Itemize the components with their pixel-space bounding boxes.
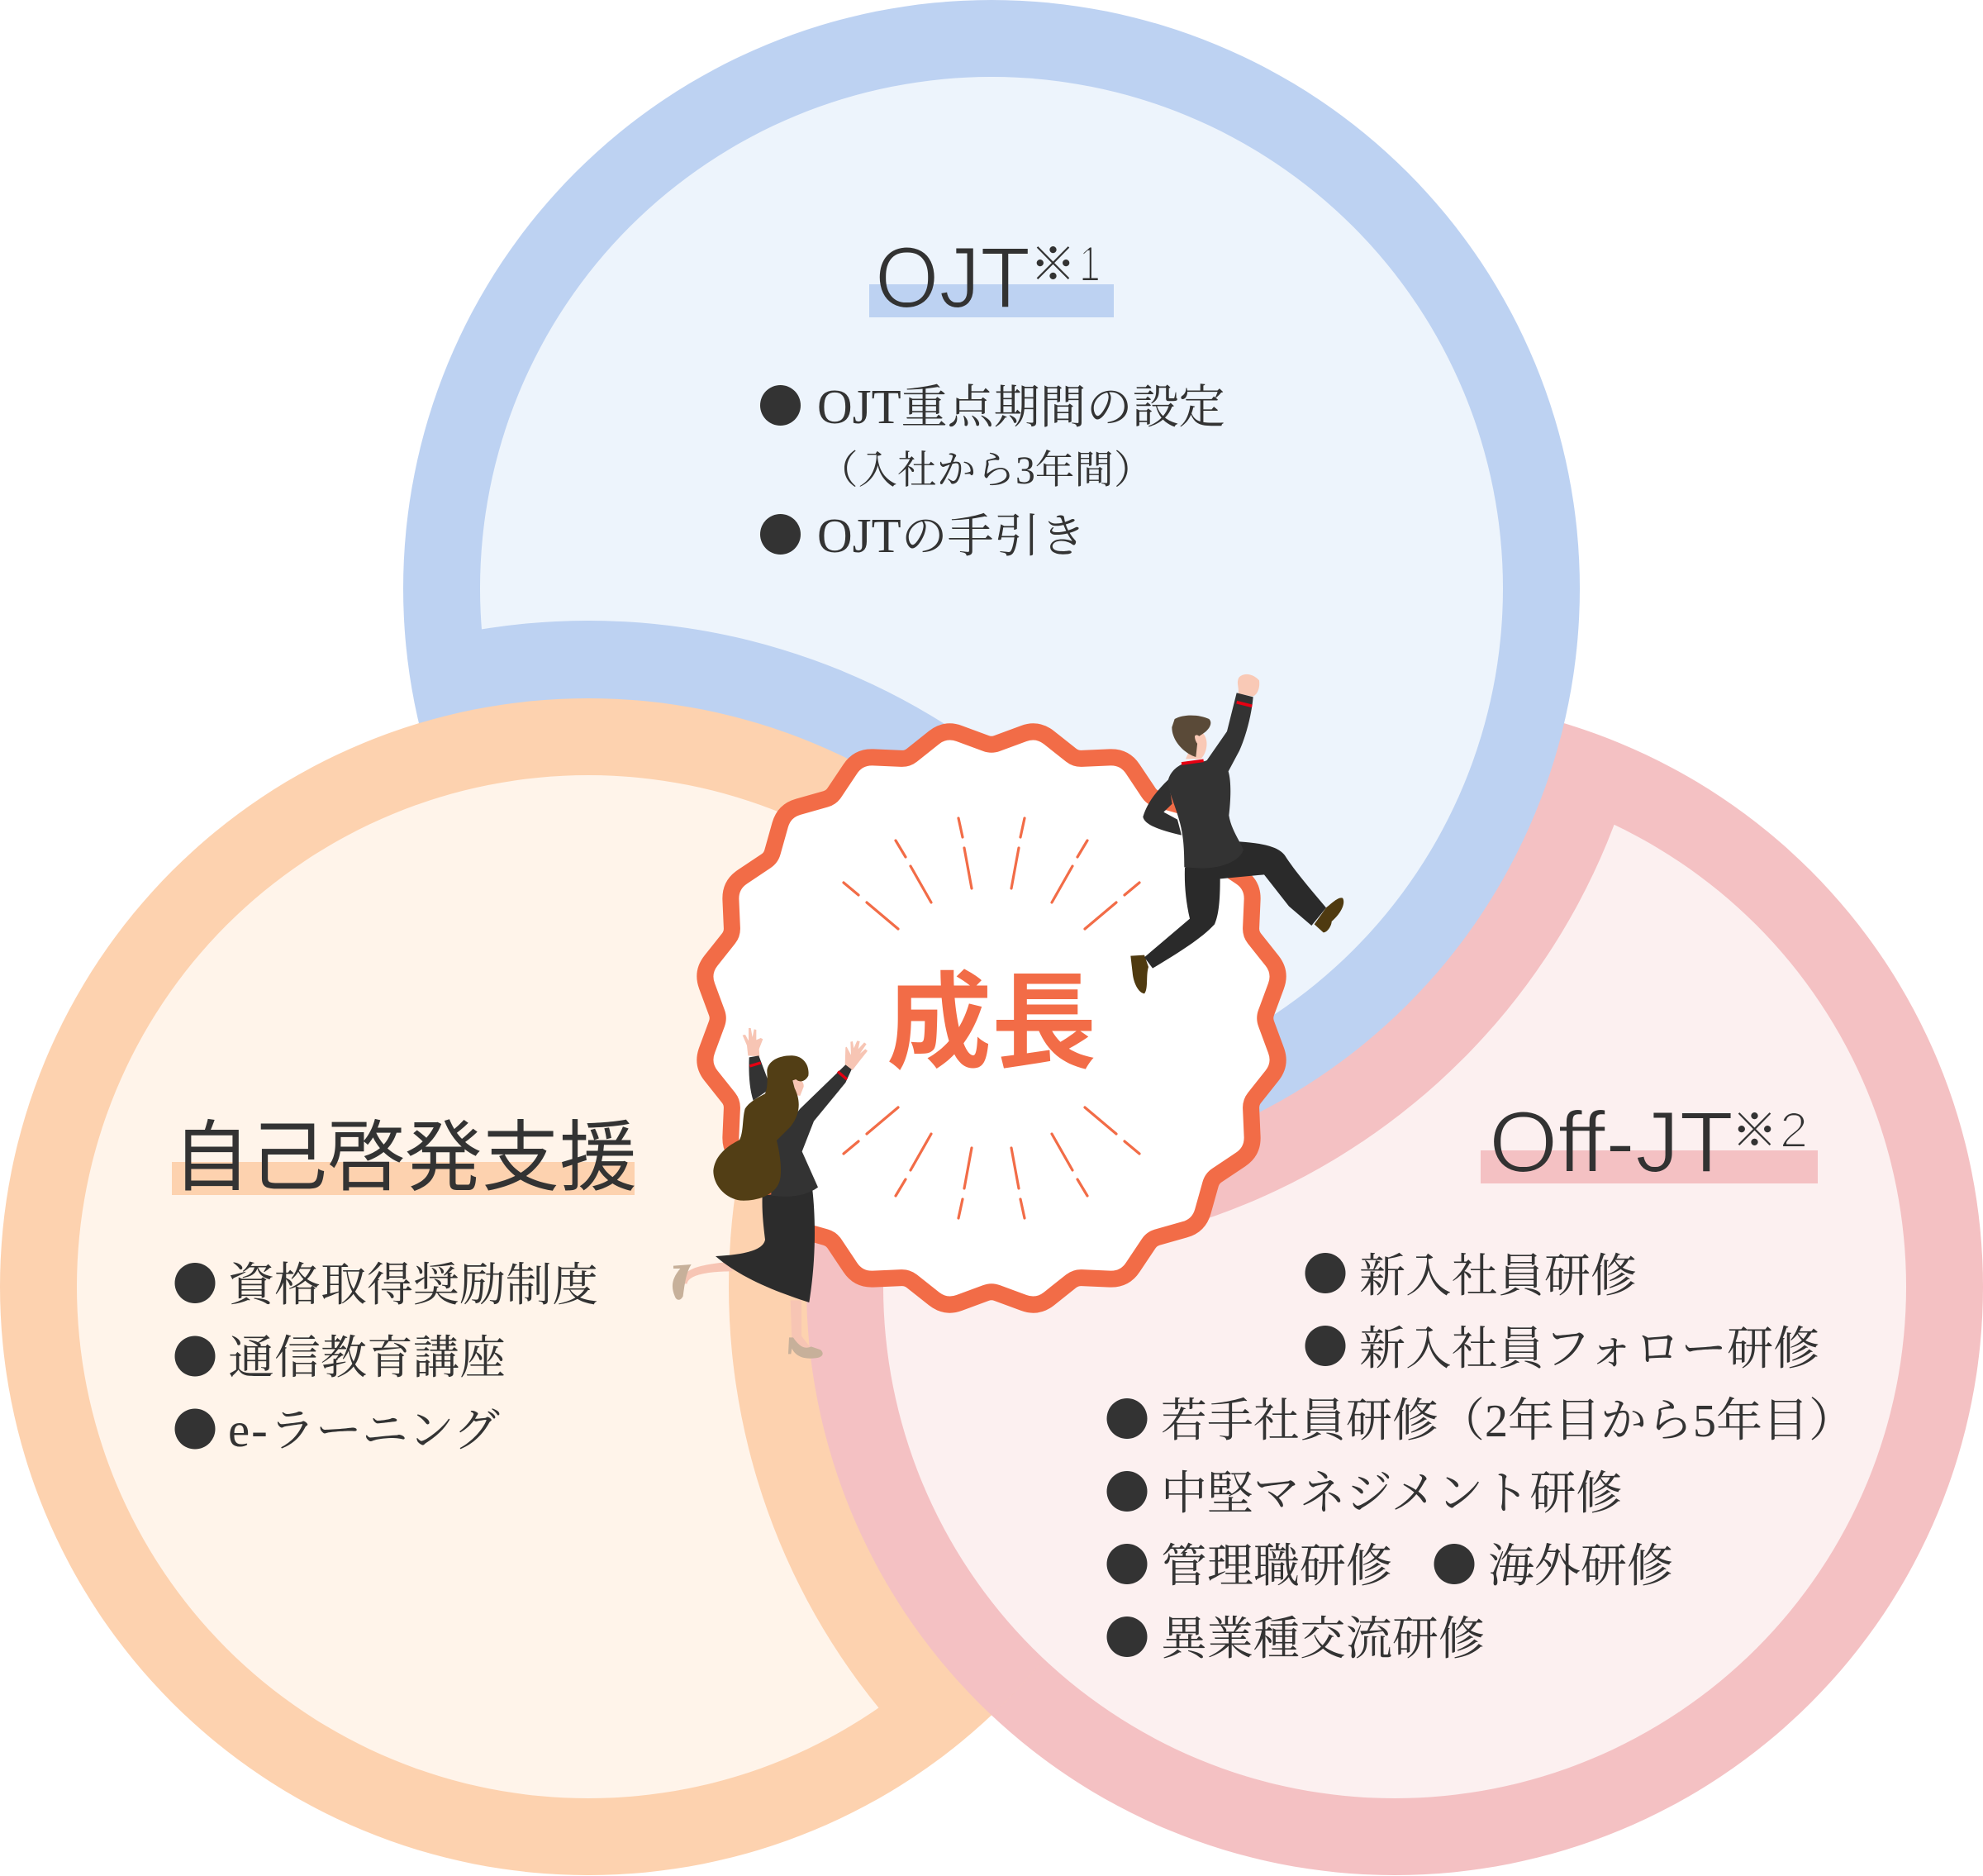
radiating burst lines <box>844 818 1139 1218</box>
orange inner panel <box>77 775 879 1798</box>
pink ring overlap above orange <box>806 1243 1044 1715</box>
bullet item: qualification support: 資格取得奨励制度 <box>228 1260 598 1312</box>
footnote mark: 1 <box>1030 236 1101 292</box>
heading: Off-JT: Off-JT <box>1489 1094 1733 1191</box>
bullet item: young employee training: 若手社員研修（2年目から5年目） <box>1161 1396 1855 1447</box>
bullet item: e-learning: e-ラーニング <box>228 1402 500 1457</box>
bullet item: OJT focus period: OJT重点期間の設定 <box>817 379 1225 434</box>
footnote mark: 2 <box>1732 1102 1808 1158</box>
panel: OJT <box>760 230 1225 563</box>
man jacket <box>1167 693 1253 869</box>
heading highlight: Off-JT <box>1481 1150 1818 1183</box>
man hair <box>1172 716 1210 757</box>
blue inner panel <box>480 77 1503 1100</box>
footnote mark: 1: 1 <box>1079 236 1101 292</box>
woman hands <box>743 1028 868 1070</box>
bullet item: new employee training: 新入社員研修 <box>1359 1251 1637 1302</box>
illustration: jumping woman <box>673 1028 868 1359</box>
center label: growth: 成長 <box>887 964 1096 1082</box>
footnote mark: 2: 2 <box>1780 1102 1808 1158</box>
illustration: jumping man <box>1130 674 1343 993</box>
woman face <box>792 1078 804 1096</box>
bullet item: manager training: 管理職研修 <box>1161 1541 1392 1593</box>
woman hair <box>713 1055 809 1201</box>
man trousers <box>1144 841 1326 969</box>
footnote mark: 1: ※ <box>1030 239 1076 290</box>
panel: Off-JT <box>1107 1094 1855 1665</box>
woman skirt <box>716 1190 815 1302</box>
bullet item: correspondence courses: 通信教育講座 <box>228 1333 506 1384</box>
man raised fist <box>1238 674 1259 697</box>
heading highlight: self-development <box>172 1162 635 1195</box>
heading highlight: OJT <box>869 284 1114 317</box>
heading: self-development support: 自己啓発支援 <box>173 1114 637 1201</box>
woman shoes <box>673 1264 823 1359</box>
bullet item: overseas training: 海外研修 <box>1488 1541 1673 1593</box>
man shoes <box>1130 898 1343 993</box>
woman red cuffs <box>749 1063 847 1079</box>
panel: self-development support <box>172 1114 637 1457</box>
bullet item: cross-industry exchange: 異業種交流研修 <box>1161 1614 1485 1665</box>
center growth badge <box>705 731 1278 1305</box>
orange circle ring: self-development <box>0 698 1177 1875</box>
man rear arm <box>1143 779 1182 836</box>
man ear <box>1195 735 1201 746</box>
blue circle ring: OJT <box>403 0 1580 1177</box>
man face <box>1186 733 1206 759</box>
text: first three years note: （入社から3年間） <box>819 449 1153 493</box>
man red trim <box>1182 702 1252 764</box>
pink inner panel <box>883 775 1906 1798</box>
bullet item: OJT guide: OJTの手引き <box>817 508 1087 563</box>
scalloped badge outline <box>705 731 1278 1305</box>
woman legs <box>680 1262 811 1353</box>
bullet item: new employee follow-up: 新入社員フォロー研修 <box>1359 1324 1819 1375</box>
pink circle ring: Off-JT <box>806 698 1983 1875</box>
bullet item: mid-level management: 中堅マネジメント研修 <box>1161 1469 1622 1520</box>
footnote mark: 2: ※ <box>1732 1105 1777 1156</box>
woman jacket and arms <box>749 1055 852 1197</box>
heading: OJT: OJT <box>875 230 1030 326</box>
